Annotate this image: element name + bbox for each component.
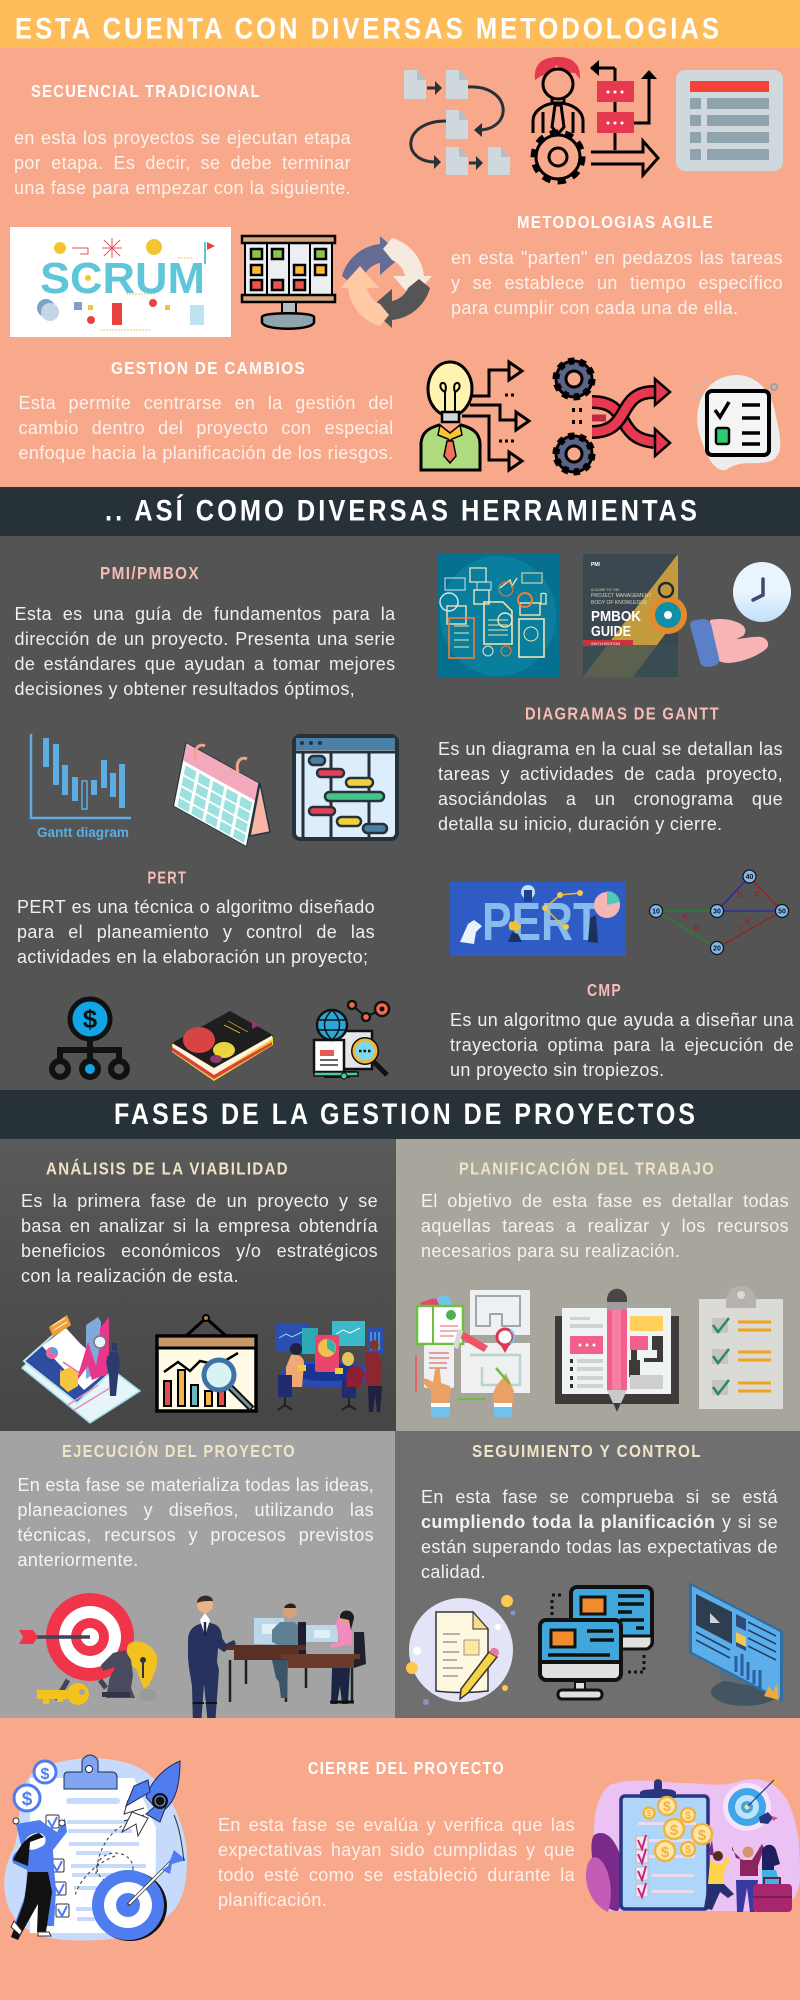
text block: cierre — [218, 1815, 575, 1910]
text block: cierre: En esta fase se evalúa y verifica que las — [218, 1815, 575, 1835]
text block: cmp: un proyecto sin tropiezos. — [450, 1060, 664, 1080]
text block: seguimiento: En esta fase se comprueba si se está — [421, 1487, 778, 1507]
image: pmbok guide book: PROJECT MANAGEMENT — [591, 593, 651, 599]
text block: pmi pmbox: decisiones y obtener resultados óptimos, — [14, 679, 355, 699]
text block: cmp: Es un algoritmo que ayuda a diseñar una — [450, 1010, 794, 1030]
icon: browser windows — [540, 1587, 652, 1699]
image: pmbok guide book: SIXTH EDITION — [591, 641, 620, 646]
image: pmbok guide book: A GUIDE TO THE — [591, 588, 620, 592]
chart: network diagram: C — [738, 925, 744, 934]
text block: ejecucion: anteriormente. — [18, 1550, 139, 1570]
chart: network diagram: F — [755, 891, 760, 900]
heading: seguimiento: SEGUIMIENTO Y CONTROL — [472, 1441, 702, 1461]
icon: dollar hierarchy: $ — [83, 1004, 98, 1034]
text block: secuencial tradicional: una fase para empezar con la siguiente. — [14, 178, 351, 198]
icon: clipboard checklist — [699, 1286, 783, 1409]
icon: globe document search — [314, 1001, 389, 1079]
title band: .. ASÍ COMO DIVERSAS HERRAMIENTAS — [105, 494, 700, 528]
chart: network diagram: E — [745, 917, 750, 926]
image: pmbok guide book: GUIDE — [591, 623, 631, 640]
text block: ejecucion — [18, 1475, 374, 1570]
icon: document flow — [404, 70, 510, 175]
icon: target with arrow, key and bulb — [19, 1593, 157, 1705]
chart: network diagram: B — [694, 924, 699, 933]
illustration: team celebrating with clipboard and coins: $ — [698, 1827, 707, 1844]
title band — [0, 0, 800, 48]
text block: planificacion: necesarios para su realización. — [421, 1241, 680, 1261]
text block: seguimiento — [421, 1487, 778, 1582]
heading: planificacion: PLANIFICACIÓN DEL TRABAJO — [459, 1158, 715, 1178]
panel: analisis de la viabilidad — [0, 1139, 396, 1431]
chart: network diagram: 50 — [778, 908, 786, 916]
icon: document and pencil — [406, 1595, 516, 1705]
chart: network diagram: 40 — [746, 874, 753, 881]
illustration: clipboard with rocket and target: $ — [22, 1789, 33, 1810]
illustration: team celebrating with clipboard and coins: $ — [647, 1809, 652, 1818]
text block: metodologias agile: en esta "parten" en pedazos las tareas — [451, 248, 783, 268]
text block: planificacion — [421, 1191, 789, 1261]
section: fases — [0, 1090, 800, 1718]
chart: network diagram: 10 — [652, 908, 660, 916]
heading: pmi pmbox: PMI/PMBOX — [100, 563, 200, 583]
image: team at desks — [188, 1596, 366, 1726]
heading: gestion de cambios: GESTION DE CAMBIOS — [111, 358, 306, 378]
text block: analisis: beneficios económicos y/o estratégicos — [21, 1241, 378, 1261]
heading: cmp: CMP — [587, 980, 622, 1000]
chart: gantt diagram: Gantt diagram — [37, 824, 129, 840]
icon: cycle arrows — [340, 236, 432, 328]
image: teal project poster — [438, 554, 559, 677]
icon: dollar hierarchy — [52, 999, 127, 1077]
title band — [0, 487, 800, 536]
text block: ejecucion: planeaciones y diseños, utilizando las — [18, 1500, 374, 1520]
icon: gantt window — [294, 736, 397, 839]
chart: gantt diagram — [31, 734, 131, 840]
text block: gestion de cambios: enfoque hacia la planificación de los riesgos. — [18, 443, 394, 463]
text block: cmp: trayectoria optima para la ejecución de — [450, 1035, 794, 1055]
text block: pmi pmbox: Esta es una guía de fundamentos para la — [14, 604, 396, 624]
text block: analisis — [21, 1191, 378, 1286]
text block: pmi pmbox: de estándares que ayudan a tomar mejores — [14, 654, 396, 674]
text block: pmi pmbox: dirección de un proyecto. Presenta una serie — [14, 629, 396, 649]
illustration: team celebrating with clipboard and coins: $ — [663, 1798, 671, 1814]
heading: diagramas de gantt: DIAGRAMAS DE GANTT — [525, 704, 720, 724]
text block: diagramas de gantt: detalla su inicio, duración y cierre. — [438, 814, 722, 834]
icon: gears and crossing arrows — [556, 361, 670, 472]
section: metodologias — [0, 0, 800, 487]
chart: network diagram: 20 — [713, 946, 721, 952]
image: pert banner — [450, 882, 626, 956]
image: scrum word cloud — [10, 227, 231, 337]
text block: diagramas de gantt: asociándolas a un cronograma que — [438, 789, 783, 809]
text block: secuencial tradicional — [14, 128, 351, 198]
image: pmbok guide book: PMBOK — [591, 608, 641, 625]
image: pmbok guide book: PMI — [591, 562, 600, 568]
icon: blueprint plans — [416, 1290, 530, 1417]
icon: table — [676, 70, 783, 171]
section: herramientas — [0, 487, 800, 1090]
text block: analisis: Es la primera fase de un proyecto y se — [21, 1191, 378, 1211]
icon: isometric monitor — [689, 1582, 783, 1706]
image: pmbok guide book — [583, 554, 687, 677]
text block: metodologias agile: para cumplir con cada una de ella. — [451, 298, 738, 318]
heading: metodologias agile: METODOLOGIAS AGILE — [517, 212, 714, 232]
text block: pert: PERT es una técnica o algoritmo diseñado — [17, 897, 375, 917]
chart: network diagram: D — [737, 891, 743, 900]
text block: gestion de cambios: cambio dentro del proyecto con especial — [18, 418, 394, 438]
text block: seguimiento: están superando todas las expectativas de — [421, 1537, 778, 1557]
icon: framed chart — [157, 1315, 256, 1411]
panel: ejecucion del proyecto — [0, 1431, 395, 1718]
text block: diagramas de gantt: Es un diagrama en la cual se detallan las — [438, 739, 783, 759]
text block: planificacion: El objetivo de esta fase es detallar todas — [421, 1191, 789, 1211]
image: scrum word cloud: SCRUM — [40, 254, 205, 303]
text block: metodologias agile — [451, 248, 783, 318]
text block: cierre: planificación. — [218, 1890, 327, 1910]
text block: pert: para el planeamiento y control de las — [17, 922, 375, 942]
icon: laptop analytics — [22, 1315, 140, 1423]
icon: kanban board — [242, 236, 335, 329]
text block: gestion de cambios: Esta permite centrarse en la gestión del — [18, 393, 394, 413]
title band: FASES DE LA GESTION DE PROYECTOS — [114, 1098, 698, 1131]
text block: cierre: todo esté como se estableció durante la — [218, 1865, 575, 1885]
text block: analisis: con la realización de esta. — [21, 1266, 239, 1286]
text block: planificacion: aquellas tareas a realizar y los recursos — [421, 1216, 789, 1236]
title band — [0, 1090, 800, 1139]
heading: pert: PERT — [148, 867, 187, 887]
text block: secuencial tradicional: por etapa. Es decir, se debe terminar — [14, 153, 351, 173]
icon: book — [172, 1011, 273, 1081]
text block: analisis: basa en analizar si la empresa obtendría — [21, 1216, 378, 1236]
text block: ejecucion: técnicas, recursos y procesos previstos — [18, 1525, 374, 1545]
illustration: team celebrating with clipboard and coins: $ — [670, 1822, 679, 1839]
panel: seguimiento y control — [395, 1431, 800, 1718]
text block: seguimiento: calidad. — [421, 1562, 486, 1582]
text block: gestion de cambios — [18, 393, 394, 463]
icon: desk calendar — [174, 742, 270, 846]
chart: network diagram: A — [682, 912, 688, 921]
icon: notebook and pencil — [555, 1289, 679, 1412]
heading: secuencial tradicional: SECUENCIAL TRADICIONAL — [31, 81, 261, 101]
text block: cmp — [450, 1010, 794, 1080]
text block: secuencial tradicional: en esta los proyectos se ejecutan etapa — [14, 128, 351, 148]
icon: checklist — [695, 375, 780, 470]
section: cierre del proyecto — [0, 1718, 800, 2000]
text block: diagramas de gantt — [438, 739, 783, 834]
chart: network diagram — [650, 870, 788, 954]
illustration: team celebrating with clipboard and coins: $ — [685, 1844, 691, 1856]
image: team meeting dashboard — [275, 1321, 383, 1412]
text block: cierre: expectativas hayan sido cumplidas y que — [218, 1840, 575, 1860]
illustration: team celebrating with clipboard and coins — [586, 1776, 800, 1912]
text block: pmi pmbox — [14, 604, 396, 699]
heading: ejecucion: EJECUCIÓN DEL PROYECTO — [62, 1440, 296, 1461]
text block: pert: actividades en la elaboración un proyecto; — [17, 947, 368, 967]
icon: idea man with arrows — [421, 362, 529, 470]
illustration: team celebrating with clipboard and coins: $ — [661, 1844, 670, 1861]
panel: planificacion del trabajo — [396, 1139, 800, 1431]
heading: analisis: ANÁLISIS DE LA VIABILIDAD — [46, 1158, 289, 1178]
icon: businessman with process arrows — [533, 57, 658, 181]
icon: clock over hand — [690, 562, 791, 667]
illustration: team celebrating with clipboard and coins: $ — [685, 1810, 691, 1822]
text block: ejecucion: En esta fase se materializa todas las ideas, — [18, 1475, 374, 1495]
image: pert banner: PERT — [482, 892, 600, 952]
text block: seguimiento: cumpliendo toda la planificación y si se — [421, 1512, 778, 1532]
heading: cierre: CIERRE DEL PROYECTO — [308, 1758, 505, 1778]
text block: metodologias agile: y se establece un tiempo específico — [451, 273, 783, 293]
text block: pert — [17, 897, 375, 967]
chart: network diagram: 30 — [713, 908, 721, 916]
text block: diagramas de gantt: tareas y actividades de cada proyecto, — [438, 764, 783, 784]
illustration: clipboard with rocket and target — [4, 1755, 187, 1941]
illustration: clipboard with rocket and target: $ — [41, 1766, 50, 1783]
image: pmbok guide book: BODY OF KNOWLEDGE — [591, 600, 648, 606]
